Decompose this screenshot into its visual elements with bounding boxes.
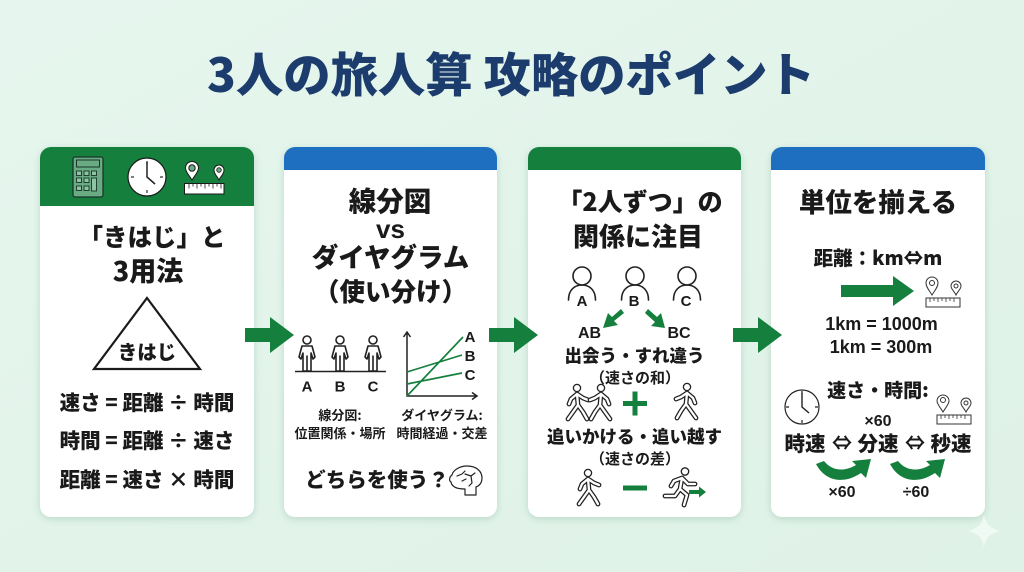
heading: speed and time: 速さ・時間: <box>827 376 929 403</box>
diagram: きはじ triangle: きはじ <box>118 336 176 365</box>
icon: sparkle watermark <box>968 515 1000 547</box>
diagram: three people on a line <box>295 336 386 396</box>
text: unit conversion row: ⇔ <box>905 427 925 456</box>
icon: map pins and ruler <box>937 395 971 424</box>
text: 速さの差: （速さの差） <box>590 448 680 469</box>
panel header: green band <box>528 147 741 170</box>
heading: 2人ずつの関係に注目 <box>557 183 723 254</box>
text: どちらを使う？: どちらを使う？ <box>305 463 449 493</box>
formula: speed: 速さ = 距離 ÷ 時間 <box>60 386 234 416</box>
heading: meet and pass: 出会う・すれ違う <box>564 343 704 368</box>
icon: persons A B C <box>568 267 700 310</box>
heading: 線分図 vs ダイヤグラム: （使い分け） <box>314 272 467 309</box>
icon: walker <box>676 383 696 418</box>
text: unit conversion row: 秒速 <box>930 427 972 457</box>
arrow: curved green right <box>890 459 945 480</box>
text: ÷60 bottom: ÷60 <box>903 484 929 501</box>
icon: clock <box>785 390 819 424</box>
heading: 線分図 vs ダイヤグラム: ダイヤグラム <box>312 236 469 275</box>
title: 3人の旅人算 攻略のポイント <box>207 37 815 106</box>
arrow: panel 1 to 2 <box>245 317 294 353</box>
heading: きはじ and 3用法: 3用法 <box>113 250 183 289</box>
panel: align units <box>771 147 985 517</box>
icon: plus <box>623 392 647 416</box>
heading: 線分図 vs ダイヤグラム <box>312 179 469 309</box>
caption: ダイヤグラム <box>396 405 488 442</box>
text: ×60 top: ×60 <box>864 413 892 430</box>
diagram: three people on a line: C <box>368 378 379 396</box>
arrow: panel 3 to 4 <box>733 317 782 353</box>
caption: 線分図: 線分図: <box>318 405 362 424</box>
arrow: curved green left <box>816 459 871 480</box>
arrow: panel 2 to 3 <box>489 317 538 353</box>
text: ×60 bottom: ×60 <box>828 484 856 501</box>
icon: clock <box>128 158 166 196</box>
heading: chase and overtake: 追いかける・追い越す <box>547 424 722 449</box>
labels: AB and BC: AB <box>578 325 601 342</box>
labels: AB and BC: BC <box>667 325 691 342</box>
icon: map pins and ruler <box>184 162 224 194</box>
icon: calculator <box>73 157 103 197</box>
heading: 単位を揃える: 単位を揃える <box>799 181 957 220</box>
icon: map pins and ruler <box>926 277 961 307</box>
arrow: green right <box>841 276 914 306</box>
text: 1km = 1000m: 1km = 1000m <box>825 314 938 334</box>
text: unit conversion row: 時速 <box>784 427 826 457</box>
panel header: blue band <box>771 147 985 170</box>
arrows: B to AB and BC <box>603 309 665 328</box>
icon: runner with arrow <box>665 468 706 505</box>
chart: diagram of three lines <box>404 329 477 400</box>
icon: brain <box>450 466 482 495</box>
text: 1km = 300m: 1km = 300m <box>830 337 932 357</box>
icon: persons A B C: A <box>577 293 588 310</box>
icon: two walkers facing each other <box>568 384 610 419</box>
text: unit conversion row <box>784 427 972 457</box>
caption: ダイヤグラム: 時間経過・交差 <box>396 423 488 442</box>
formula: time: 時間 = 距離 ÷ 速さ <box>60 424 234 454</box>
text: distance units: 距離：km⇔m <box>814 242 942 271</box>
heading: 線分図 vs ダイヤグラム: 線分図 <box>349 179 431 219</box>
heading: きはじ and 3用法 <box>78 219 226 289</box>
caption: ダイヤグラム: ダイヤグラム: <box>401 405 483 424</box>
diagram: きはじ triangle <box>94 298 200 369</box>
panel header: green band with icons <box>40 147 254 206</box>
heading: 2人ずつの関係に注目: 「2人ずつ」の <box>557 183 723 219</box>
heading: 2人ずつの関係に注目: 関係に注目 <box>573 217 703 254</box>
icon: persons A B C: C <box>681 293 692 310</box>
text: 速さの和: （速さの和） <box>590 367 680 388</box>
text: unit conversion row: 分速 <box>858 427 899 457</box>
icon: minus <box>623 486 647 490</box>
diagram: three people on a line: A <box>302 378 313 396</box>
panel: きはじ and 3 formulas <box>40 147 254 517</box>
icon: walker <box>579 469 599 504</box>
panel header: blue band <box>284 147 497 170</box>
caption: 線分図 <box>294 405 386 442</box>
chart: diagram of three lines: C <box>465 367 476 384</box>
diagram: three people on a line: B <box>335 378 346 396</box>
panel: focus on pairs <box>528 147 741 517</box>
chart: diagram of three lines: A <box>465 329 476 346</box>
heading: きはじ and 3用法: 「きはじ」と <box>78 219 226 254</box>
heading: 線分図 vs ダイヤグラム: vs <box>376 214 405 244</box>
formula: distance: 距離 = 速さ × 時間 <box>60 463 234 493</box>
text: unit conversion row: ⇔ <box>832 427 852 456</box>
chart: diagram of three lines: B <box>465 348 476 365</box>
panel: line diagram vs time chart <box>284 147 497 517</box>
caption: 線分図: 位置関係・場所 <box>294 423 386 442</box>
icon: persons A B C: B <box>629 293 640 310</box>
labels: AB and BC <box>578 325 691 342</box>
